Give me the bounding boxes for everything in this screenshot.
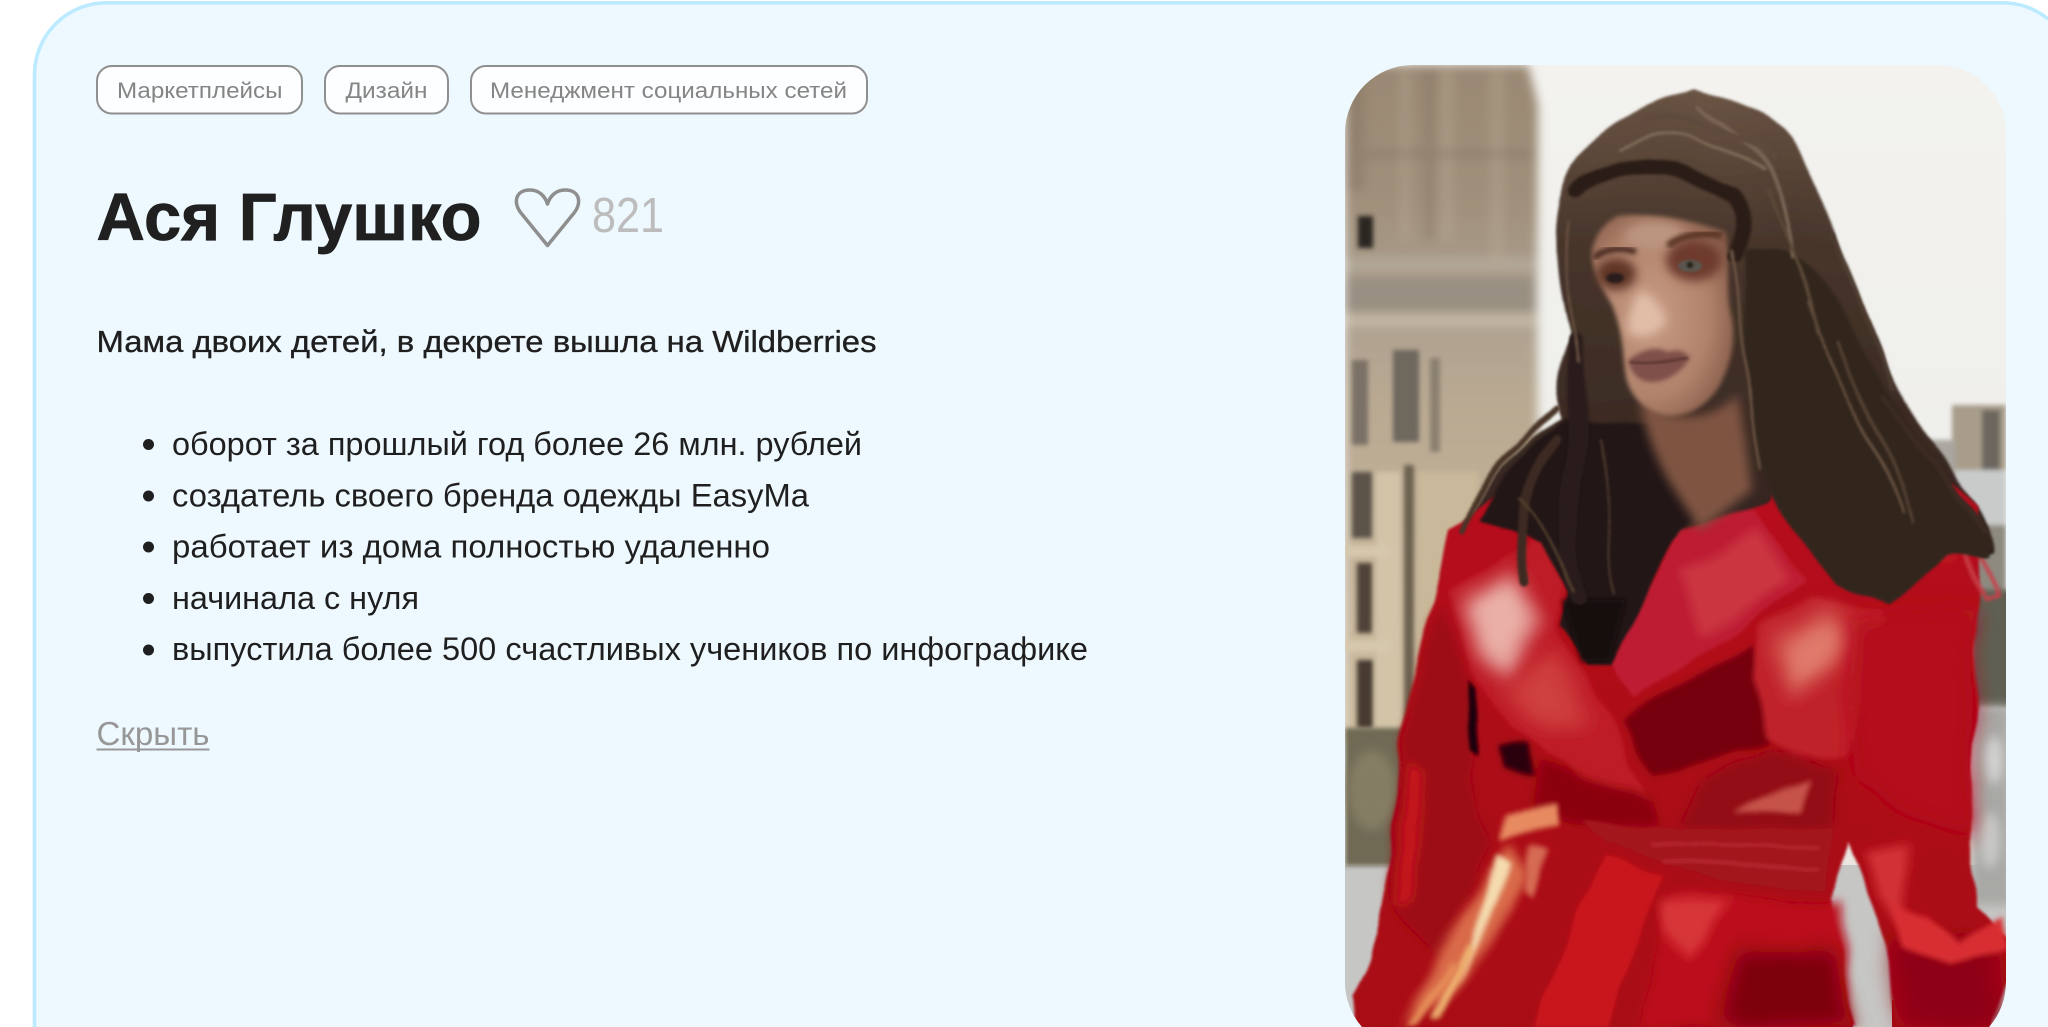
photo background: stone building (1345, 65, 1538, 740)
tag: design (325, 66, 448, 114)
bullet: brand: создатель своего бренда одежды EasyMa (172, 478, 809, 514)
photo: right hair lock over coat (1745, 248, 1990, 605)
likes count: 821 (592, 189, 664, 243)
tag: marketplaces: Маркетплейсы (117, 78, 282, 103)
coat: right lapel (1610, 510, 1810, 700)
photo: woman in red coat (1345, 65, 2012, 1027)
photo background: sky (1345, 65, 2006, 1027)
face: right brow (1668, 234, 1722, 246)
photo: lace top (1562, 600, 1625, 662)
coat: left lapel (1448, 530, 1648, 803)
photo background: distant buildings (1925, 405, 2006, 595)
bullet: turnover: оборот за прошлый год более 26 млн. рублей (172, 426, 862, 462)
face: left brow (1594, 249, 1636, 258)
photo: hair back (1473, 88, 1996, 557)
tag: design: Дизайн (346, 78, 428, 103)
tag: marketplaces (97, 66, 302, 114)
icon: heart (516, 190, 579, 246)
coat: chest dark (1620, 643, 1772, 777)
coat: left sleeve shading (1390, 600, 1490, 960)
lapel highlight (1462, 575, 1535, 680)
face: eye shadow right (1666, 239, 1722, 281)
title: Ася Глушко (96, 180, 482, 255)
coat: gold reflections (1400, 843, 1529, 1027)
face: lips (1628, 349, 1690, 382)
bullet: from scratch: начинала с нуля (172, 580, 419, 616)
link: hide: Скрыть (96, 715, 210, 752)
bullet list (143, 426, 1088, 667)
photo: hair over neckline (1478, 418, 1692, 667)
photo background: building windows (1345, 216, 1478, 738)
coat: storm flap (1753, 600, 1887, 758)
photo background: shrubs and ground (1345, 590, 2012, 1027)
photo: coat bottom edge (1360, 1000, 1995, 1027)
coat: body folds (1680, 750, 1840, 830)
face: left eye (1606, 273, 1624, 283)
coat: hanging belt (1530, 857, 1663, 1027)
face: eye shadow left (1596, 258, 1636, 290)
tag: social media management (471, 66, 867, 114)
coat: skirt bright fold (1640, 890, 1850, 1027)
photo: hair front strands (1462, 105, 1985, 595)
coat: right sleeve (1850, 610, 1975, 840)
intro text: Мама двоих детей, в декрете вышла на Wildberries (96, 324, 877, 359)
tag: social media management: Менеджмент социальных сетей (490, 78, 847, 103)
tags row (97, 66, 867, 114)
photo: red coat (1352, 434, 2010, 1027)
coat: upper red right (1942, 556, 1958, 564)
face: forehead highlight (1625, 222, 1685, 250)
photo: neck (1640, 395, 1752, 530)
photo: face (1592, 215, 1733, 416)
bullet: students: выпустила более 500 счастливых учеников по инфографике (172, 631, 1088, 667)
face: nose (1628, 290, 1667, 337)
coat: arm-body gap (1466, 680, 1476, 755)
bullet: remote: работает из дома полностью удаленно (172, 528, 770, 564)
coat: belt (1586, 817, 1834, 893)
face: right eye (1678, 260, 1702, 272)
